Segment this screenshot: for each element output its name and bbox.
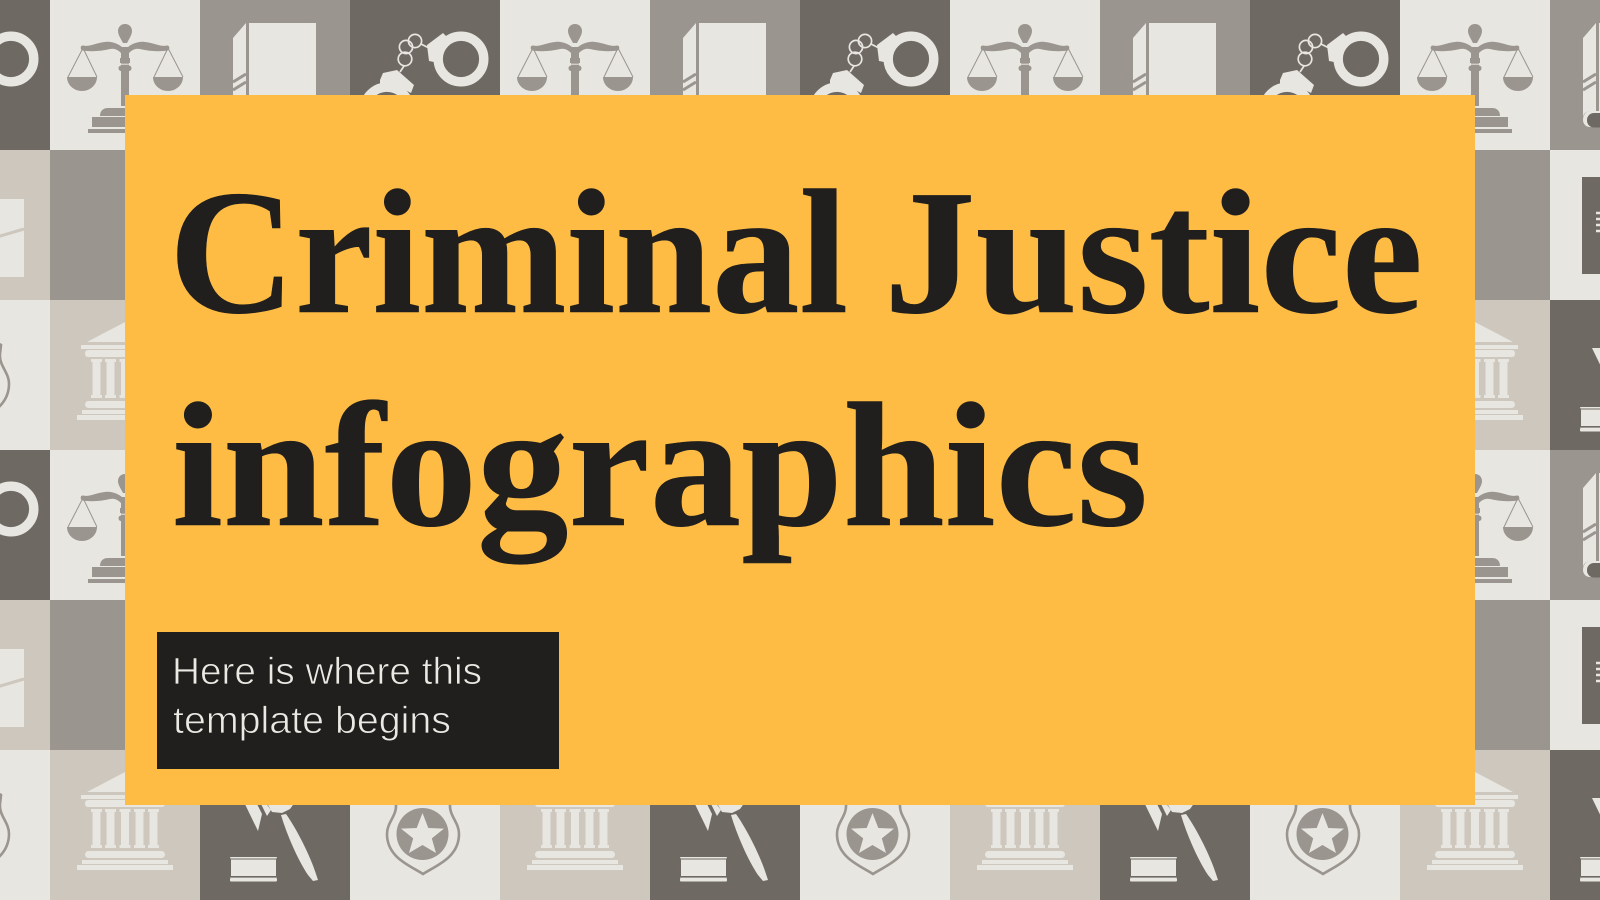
background tile: handcuffs, row 1 (1250, 0, 1400, 150)
background tile: law book, row 1 (650, 0, 800, 150)
title (169, 153, 1423, 565)
background tile: gavel, row 6 (200, 750, 350, 900)
background tile: courthouse, row 3 (1400, 300, 1550, 450)
background tile: police badge, row 6 (0, 750, 50, 900)
background tile: gavel, row 6 (650, 750, 800, 900)
background tile: plain grey, row 5 (50, 600, 200, 750)
background tile: law book, row 1 (200, 0, 350, 150)
background tile: dark book, row 5 (1550, 600, 1600, 750)
title: Criminal (169, 153, 848, 351)
background tile: courthouse, row 6 (50, 750, 200, 900)
background tile: courthouse, row 3 (50, 300, 200, 450)
background tile: gavel, row 3 (1550, 300, 1600, 450)
background tile: gavel, row 6 (1550, 750, 1600, 900)
background tile: courthouse, row 6 (1400, 750, 1550, 900)
background tile: law book, row 1 (1550, 0, 1600, 150)
background tile: document, row 2 (0, 150, 50, 300)
background tile: scales of justice, row 1 (50, 0, 200, 150)
background tile: handcuffs, row 1 (0, 0, 50, 150)
background tile: plain grey, row 2 (50, 150, 200, 300)
background tile: scales of justice, row 4 (50, 450, 200, 600)
background tile: dark book, row 2 (1550, 150, 1600, 300)
background tile: law book, row 4 (1550, 450, 1600, 600)
background tile: courthouse, row 6 (950, 750, 1100, 900)
background tile: law book, row 1 (1100, 0, 1250, 150)
background tile: police badge, row 6 (800, 750, 950, 900)
background tile: scales of justice, row 1 (1400, 0, 1550, 150)
background tile: handcuffs, row 4 (0, 450, 50, 600)
title: Justice (884, 153, 1423, 351)
background tile: police badge, row 6 (350, 750, 500, 900)
background tile: handcuffs, row 1 (350, 0, 500, 150)
subtitle box: template begins (173, 700, 451, 742)
background tile: courthouse, row 6 (500, 750, 650, 900)
background tile: scales of justice, row 1 (500, 0, 650, 150)
subtitle box: Here is where this (172, 651, 482, 693)
background tile: plain grey, row 2 (1400, 150, 1550, 300)
background tile: police badge, row 6 (1250, 750, 1400, 900)
background tile: document, row 5 (0, 600, 50, 750)
background tile: scales of justice, row 1 (950, 0, 1100, 150)
title: infographics (172, 366, 1148, 565)
background tile: plain grey, row 5 (1400, 600, 1550, 750)
subtitle box (157, 632, 559, 769)
background tile: scales of justice, row 4 (1400, 450, 1550, 600)
background tile: gavel, row 6 (1100, 750, 1250, 900)
background tile: police badge, row 3 (0, 300, 50, 450)
background tile: handcuffs, row 1 (800, 0, 950, 150)
panel: yellow title card (125, 95, 1475, 805)
